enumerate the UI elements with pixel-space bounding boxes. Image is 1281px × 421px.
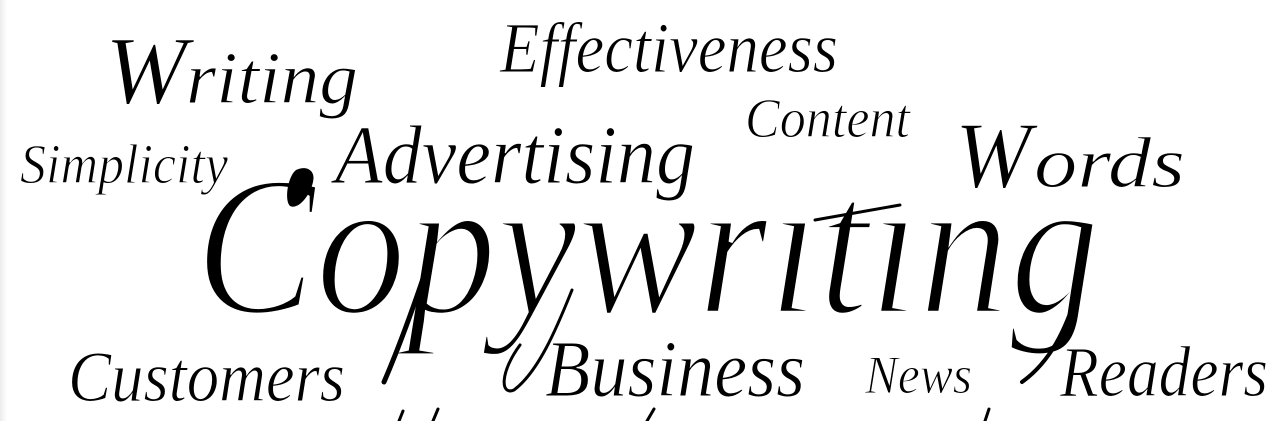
- word: Words: ords: [1034, 123, 1185, 203]
- word: Simplicity: Simplicity: [20, 134, 228, 196]
- word: Words: [955, 104, 1185, 208]
- word: Words: W: [955, 104, 1038, 208]
- word: Writing: riting: [186, 38, 358, 120]
- word: Effectiveness: Effectiveness: [499, 8, 838, 88]
- word: Business: Business: [545, 326, 805, 414]
- word: Advertising: Advertising: [330, 109, 695, 202]
- word: Content: Content: [745, 88, 911, 150]
- word: News: News: [864, 345, 972, 405]
- word: Writing: [105, 17, 358, 124]
- word: Copywriting: Copywriting: [195, 136, 1100, 357]
- word: Writing: W: [105, 17, 195, 124]
- word: Customers: Customers: [68, 337, 345, 417]
- cropped tops of a row of words at the bottom edge: [399, 409, 989, 421]
